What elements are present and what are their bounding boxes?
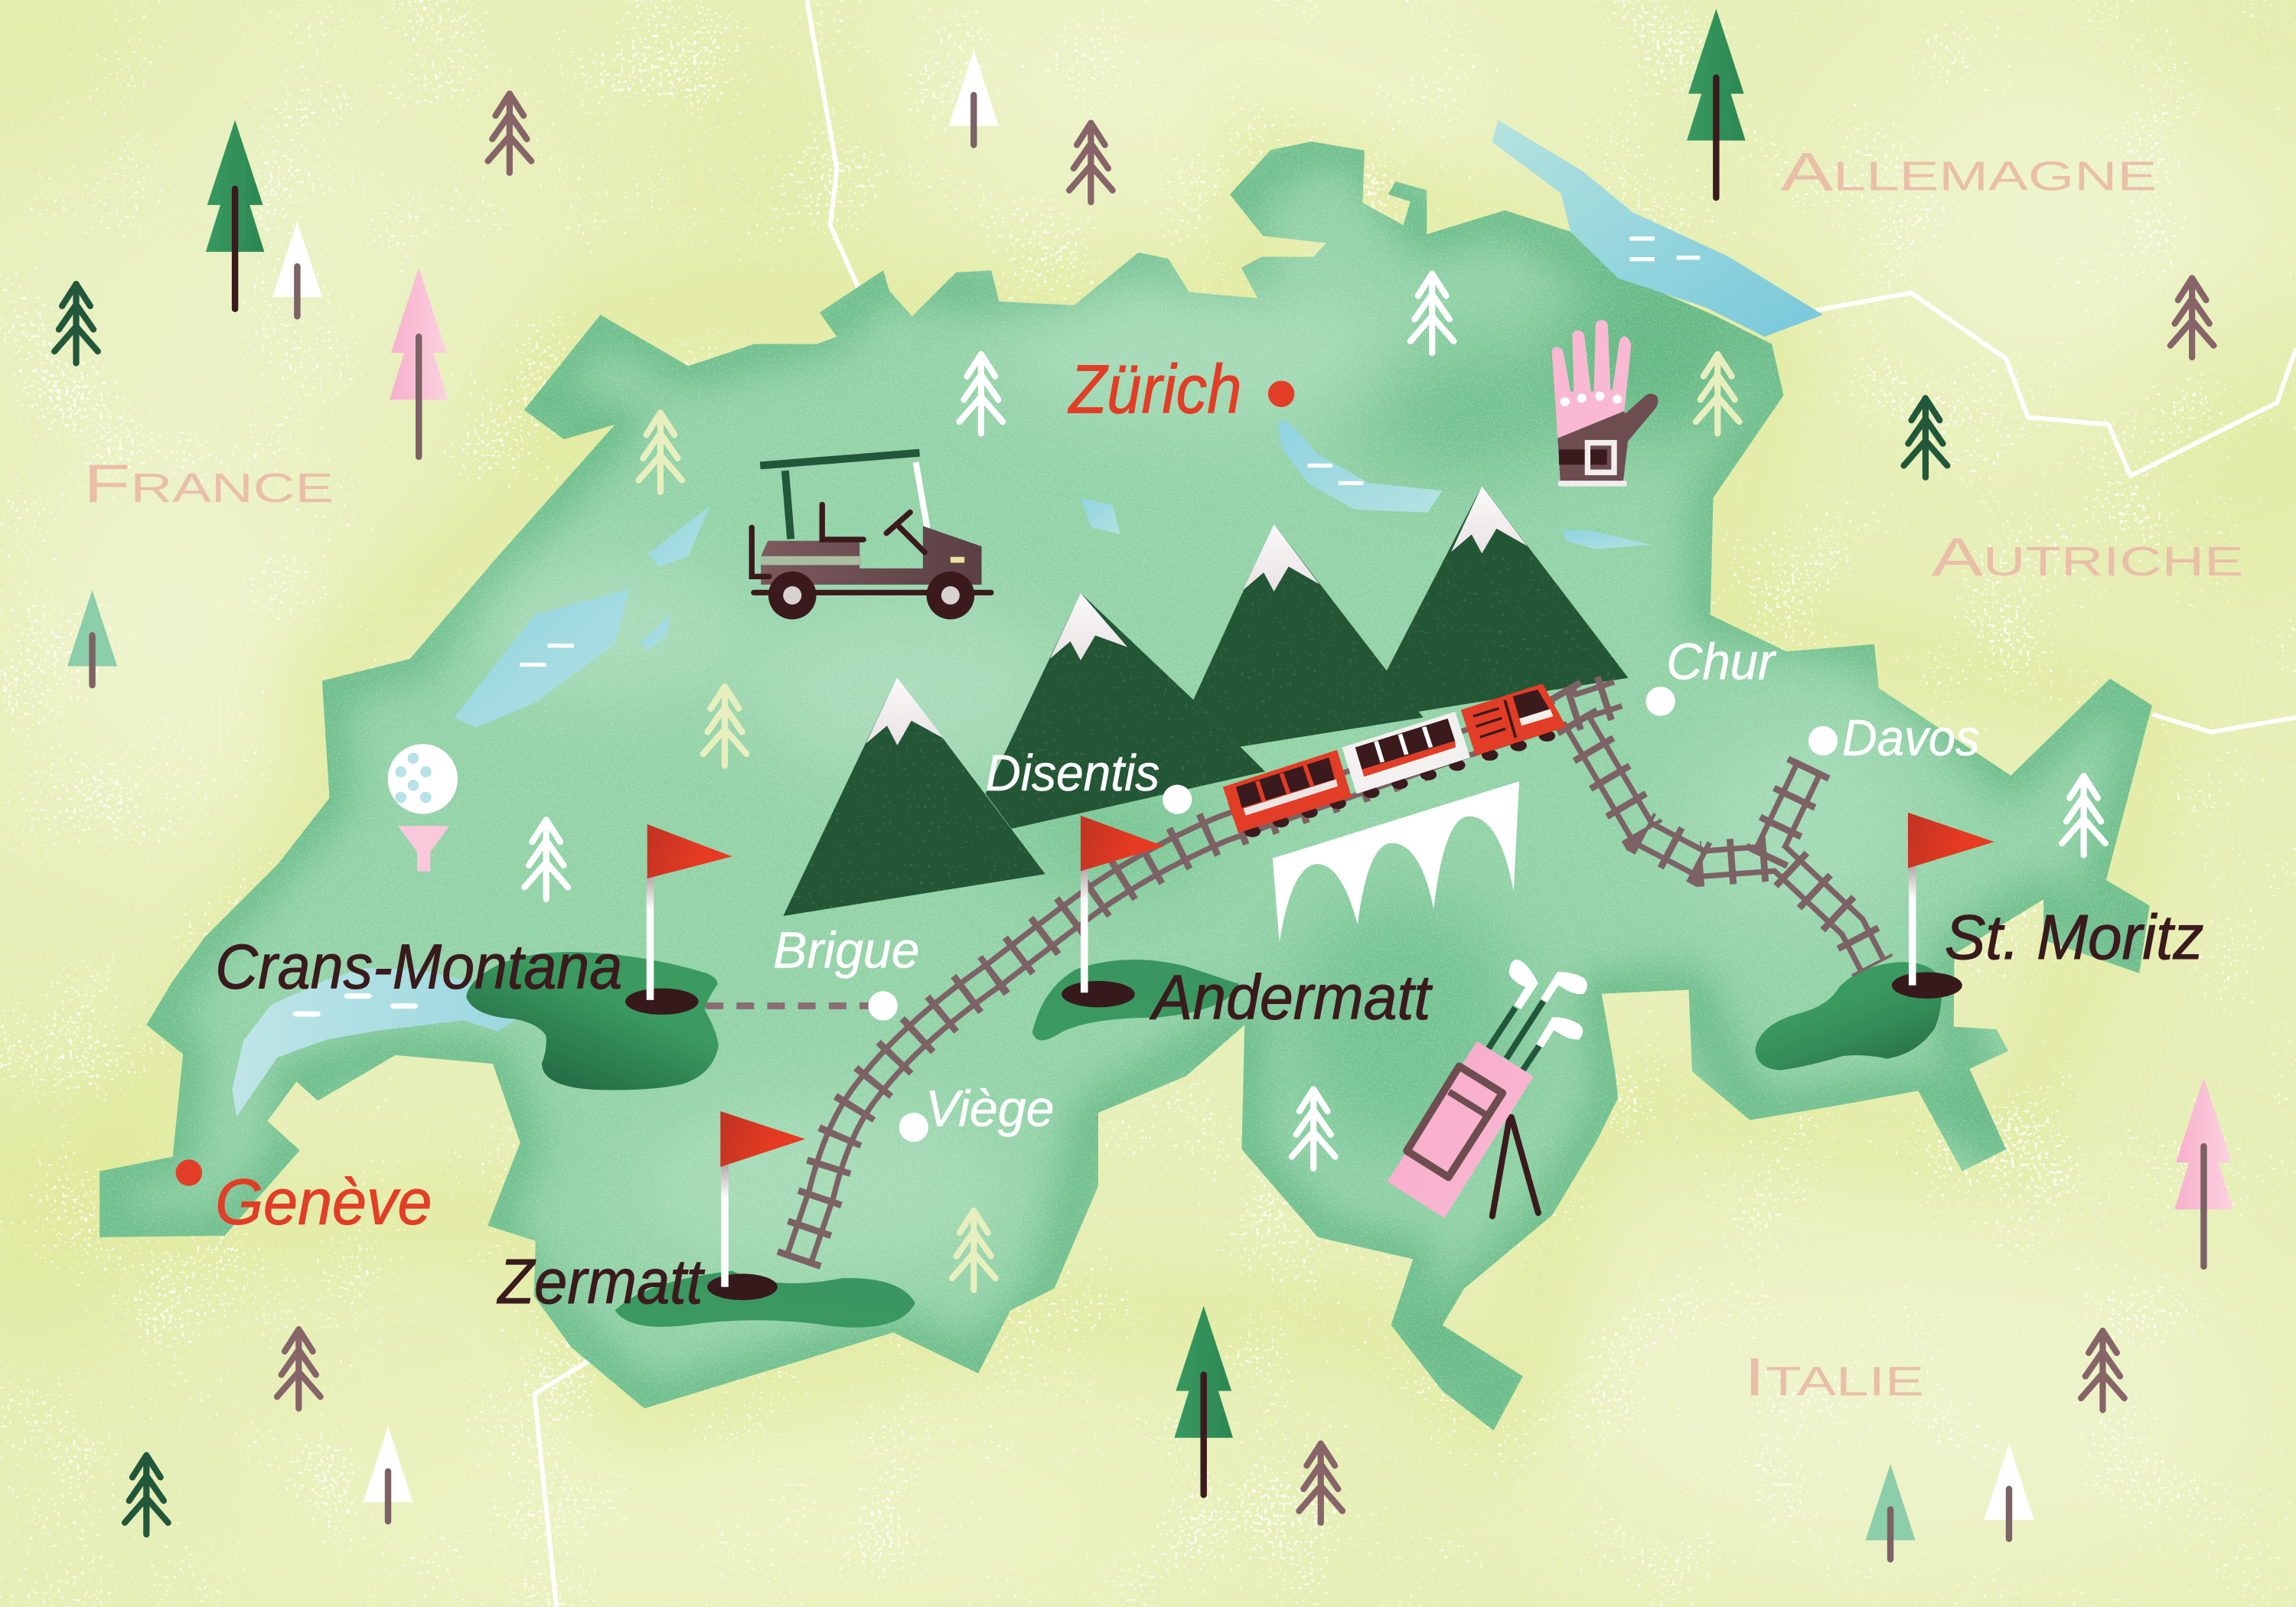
- mountains: [776, 486, 1640, 922]
- dashed connection Crans-Montana to Brigue: [706, 1004, 872, 1008]
- label: Disentis: Disentis: [986, 745, 1159, 802]
- tree: dark green line: [1904, 398, 1947, 478]
- lake: Léman: [232, 968, 515, 1116]
- lakes: [232, 120, 1823, 1116]
- label: Genève: Genève: [215, 1165, 432, 1237]
- label: France: F RANCE: [83, 454, 334, 514]
- tree: small white: [272, 221, 322, 316]
- tree: brown line: [2081, 1331, 2125, 1410]
- tree: small white: [1984, 1443, 2034, 1539]
- icon: golf bag: [1388, 960, 1587, 1218]
- icon: golf ball on tee: [388, 744, 458, 872]
- lake: Neuchâtel: [454, 588, 630, 728]
- tree: dark green line: [125, 1455, 168, 1534]
- label: Brigue: Brigue: [773, 922, 920, 980]
- lake: Bienne: [649, 505, 710, 566]
- tree: tall pink: [390, 268, 448, 457]
- flags: [625, 813, 1994, 1300]
- tree: dark green line: [54, 284, 98, 363]
- tree: tall green: [1687, 8, 1746, 197]
- wagon: white middle car: [1342, 712, 1470, 798]
- green: Crans-Montana: [466, 952, 719, 1090]
- tree: brown line: [277, 1329, 321, 1409]
- tree: brown line: [2170, 279, 2213, 357]
- tree: cream line: [639, 413, 682, 492]
- tree: small white: [363, 1426, 413, 1521]
- flag: Crans-Montana: [625, 824, 732, 1015]
- tree: tall green: [1174, 1306, 1233, 1495]
- flag: St. Moritz: [1892, 813, 1994, 999]
- label: Viège: Viège: [925, 1080, 1055, 1137]
- lake: Bodensee: [1492, 120, 1823, 337]
- tree: brown line: [1299, 1443, 1342, 1523]
- label: Zermatt: Zermatt: [497, 1247, 705, 1317]
- label: Chur: Chur: [1666, 634, 1777, 691]
- flag: Andermatt: [1062, 816, 1164, 1007]
- label: Allemagne: A LLEMAGNE: [1781, 142, 2157, 203]
- mountain 2: [986, 593, 1265, 829]
- tree: brown line: [1069, 123, 1113, 202]
- label: St. Moritz: St. Moritz: [1945, 903, 2203, 973]
- tree: tall pink: [2174, 1077, 2233, 1266]
- label: Crans-Montana: Crans-Montana: [215, 932, 622, 1002]
- tree: cream line: [952, 1211, 996, 1290]
- town markers: [176, 380, 1838, 1186]
- icon: golf cart: [752, 453, 991, 619]
- mountain speckle: [776, 556, 1640, 922]
- tree: brown line: [488, 93, 531, 173]
- map of Switzerland: [99, 142, 2152, 1431]
- tree: white line: [960, 354, 1003, 433]
- lake: Walensee: [1562, 530, 1650, 549]
- icon: golf glove: [1552, 320, 1658, 487]
- label: Andermatt: Andermatt: [1149, 963, 1433, 1033]
- label: Zürich: Zürich: [1068, 352, 1241, 429]
- lake: Morat: [640, 615, 670, 650]
- viaduct: [1273, 781, 1519, 943]
- tree: cream line: [703, 686, 746, 766]
- label: Davos: Davos: [1842, 709, 1980, 767]
- golf greens: [466, 952, 1942, 1328]
- tree: white line: [2062, 776, 2105, 855]
- label: Italie: I TALIE: [1744, 1347, 1924, 1407]
- green: St. Moritz: [1756, 962, 1942, 1070]
- tree: tall green: [206, 120, 264, 309]
- label: Autriche: A UTRICHE: [1932, 527, 2243, 588]
- tree: white line: [1411, 274, 1453, 353]
- flag: Zermatt: [707, 1111, 805, 1300]
- mountain 1: [783, 677, 1045, 916]
- tree: small white: [949, 50, 999, 145]
- country borders: [534, 0, 2296, 1607]
- lake: Zürichsee: [1277, 422, 1443, 513]
- wagon: red rear car: [1223, 750, 1352, 837]
- city labels: [215, 352, 2203, 1317]
- tree: white line: [1292, 1089, 1336, 1169]
- train: [1223, 683, 1567, 837]
- tree: small pale green: [1866, 1464, 1916, 1560]
- mountain 3: [1193, 524, 1424, 747]
- tree: white line: [524, 820, 568, 899]
- tree: cream line: [1696, 354, 1740, 433]
- country labels: [83, 142, 2243, 1407]
- mountain 4: [1384, 486, 1629, 712]
- wagon: locomotive: [1461, 683, 1567, 761]
- lake: Vierwaldstättersee: [1081, 498, 1120, 534]
- green: Zermatt: [615, 1271, 915, 1328]
- tree: small pale green: [67, 590, 117, 685]
- green: Andermatt: [1032, 960, 1239, 1040]
